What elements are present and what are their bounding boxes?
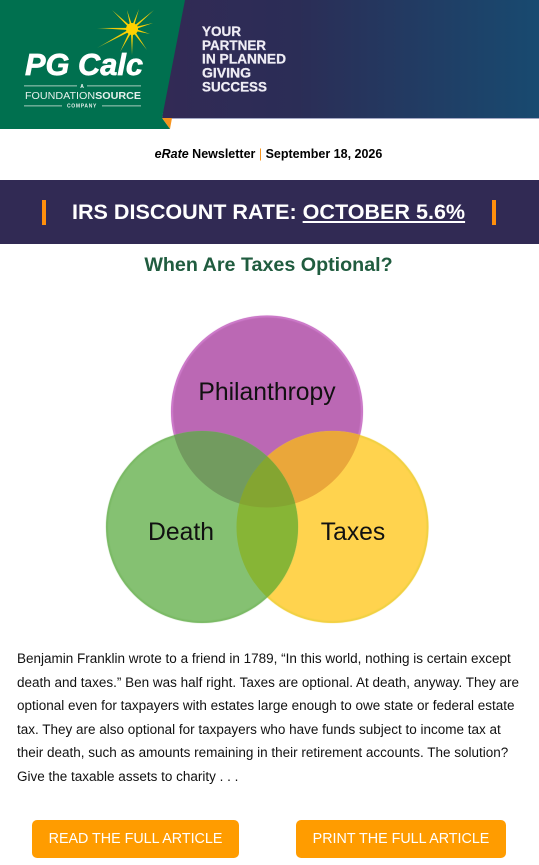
newsletter date line: eRate Newsletter | September 18, 2026 <box>155 147 382 161</box>
venn diagram <box>106 315 430 624</box>
icon: starburst <box>97 9 154 55</box>
button: read the full article <box>32 820 239 858</box>
tagline: YOUR <box>202 24 241 39</box>
panel: green logo background <box>0 0 185 129</box>
article body text: tax. They are also optional for taxpayers who have funds subject to income tax at <box>17 722 501 737</box>
circle: death <box>106 431 298 623</box>
logo small a: A <box>80 84 84 90</box>
button: print the full article: PRINT THE FULL ARTICLE <box>313 831 489 847</box>
label: taxes: Taxes <box>321 519 385 546</box>
circle: taxes <box>236 431 428 623</box>
tagline <box>202 24 286 95</box>
article body text: death and taxes.” Ben was half right. Taxes are optional. At death, anyway. They are <box>17 675 519 690</box>
overlap: death and taxes <box>236 456 298 598</box>
right orange bar <box>492 200 496 225</box>
button: read the full article: READ THE FULL ARTICLE <box>49 831 222 847</box>
overlap: all three <box>240 456 295 508</box>
article body text: their death, such as amounts remaining in their retirement accounts. The solution? <box>17 745 508 760</box>
overlap: philanthropy and death <box>174 431 295 504</box>
discount rate text: IRS DISCOUNT RATE: OCTOBER 5.6% <box>72 199 465 224</box>
overlap: philanthropy and taxes <box>268 431 360 504</box>
label: philanthropy: Philanthropy <box>198 379 336 406</box>
panel: tagline background <box>162 0 539 118</box>
logo company: COMPANY <box>67 104 97 110</box>
article body text: optional even for taxpayers with estates large enough to owe state or federal estate <box>17 698 515 713</box>
logo wordmark: PG Calc <box>25 47 143 82</box>
left orange bar <box>42 200 46 225</box>
discount rate banner <box>0 180 539 244</box>
header banner <box>0 0 539 129</box>
tagline: GIVING <box>202 66 251 81</box>
article body text: Give the taxable assets to charity . . . <box>17 769 238 784</box>
tagline: SUCCESS <box>202 80 267 95</box>
logo foundation source: FOUNDATION SOURCE <box>25 91 142 102</box>
article title: When Are Taxes Optional? <box>144 254 393 276</box>
article body text: Benjamin Franklin wrote to a friend in 1789, “In this world, nothing is certain except <box>17 651 511 666</box>
circle: philanthropy <box>171 316 363 508</box>
article body text <box>17 651 519 784</box>
button: print the full article <box>296 820 506 858</box>
tagline: PARTNER <box>202 38 266 53</box>
tagline: IN PLANNED <box>202 52 286 67</box>
label: death: Death <box>148 519 214 546</box>
orange corner <box>162 118 172 129</box>
